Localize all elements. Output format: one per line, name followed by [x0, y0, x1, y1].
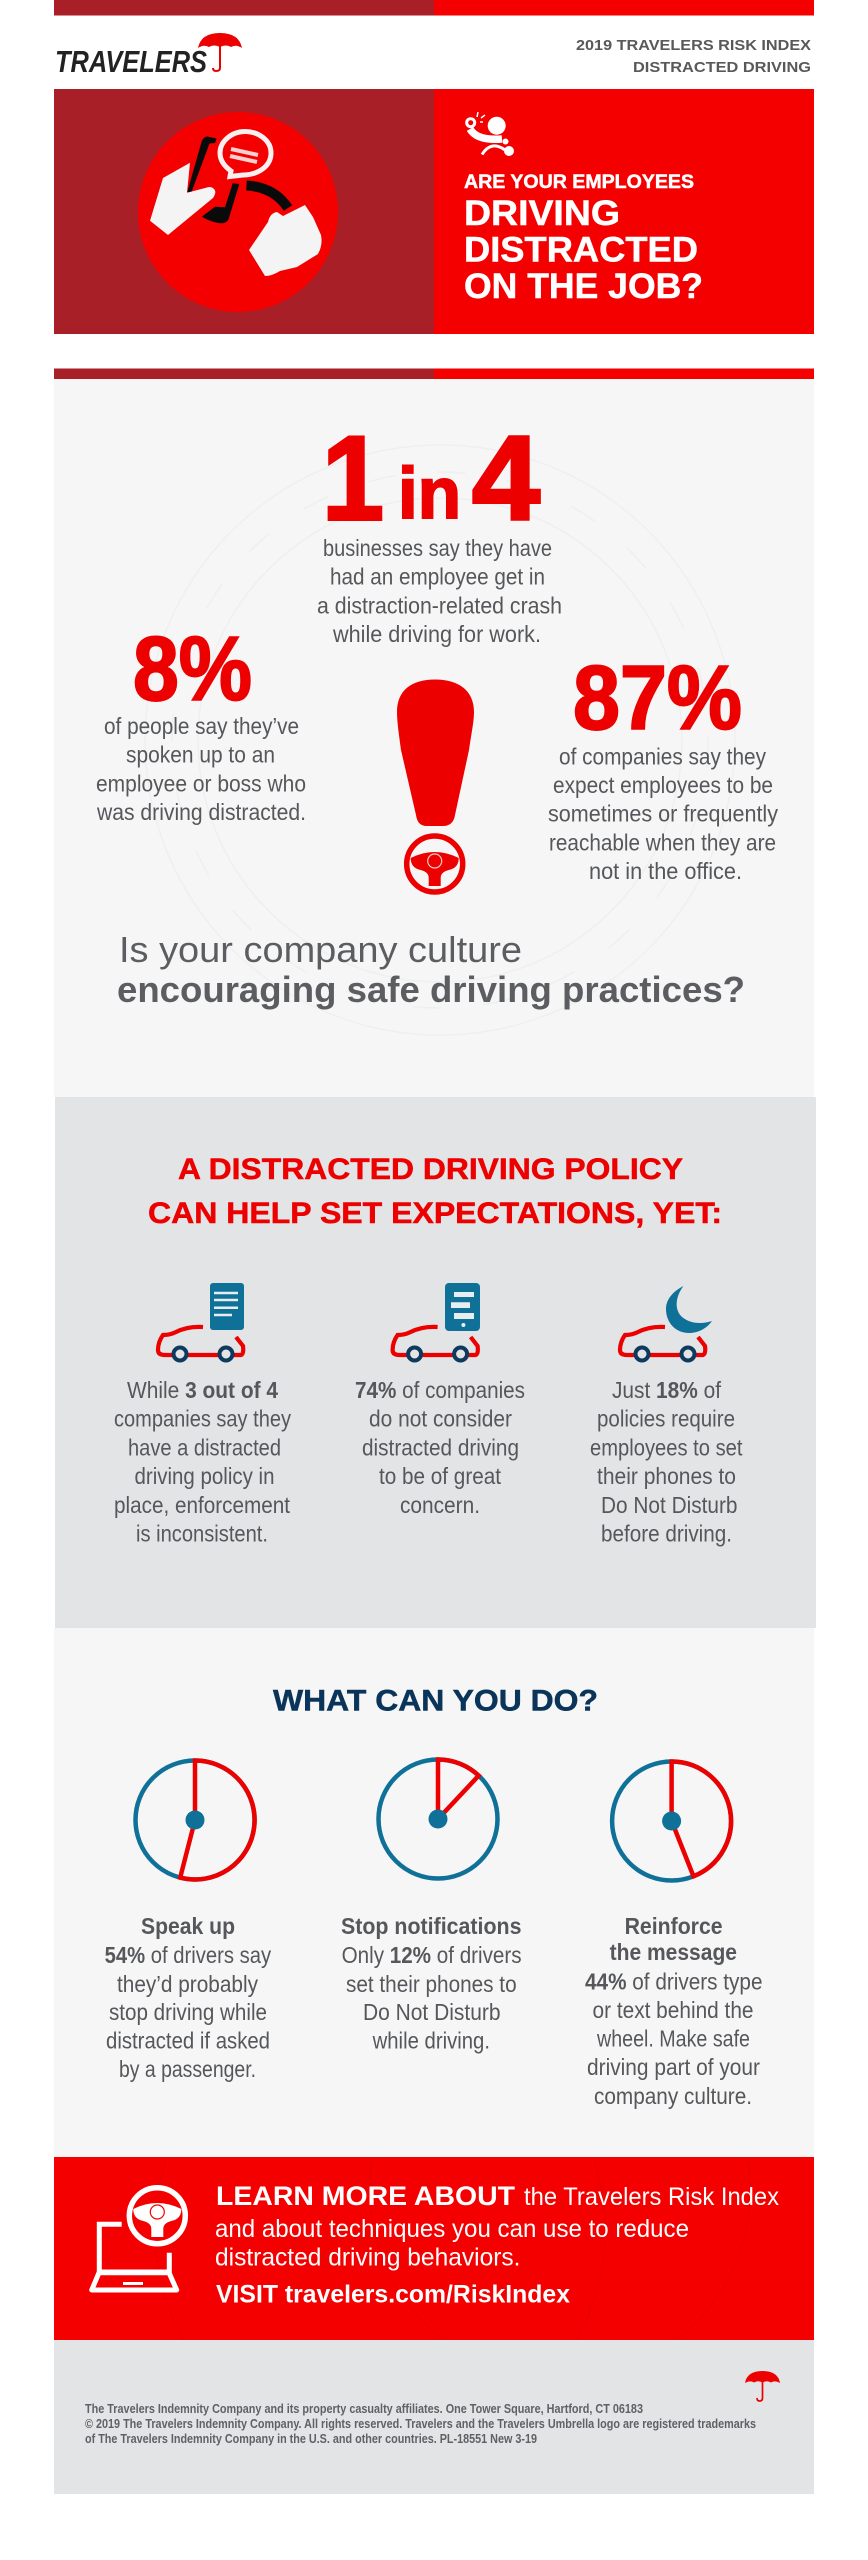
second colour bar [54, 368, 814, 379]
illustration: hands on phone and wheel [138, 112, 338, 312]
report title: 2019 TRAVELERS RISK INDEX [576, 37, 811, 54]
stat: 87%: sometimes or frequently [548, 801, 778, 827]
question: company culture: encouraging safe driving practices? [117, 969, 745, 1010]
text: reinforce the message [585, 1913, 762, 2109]
text: 74%: 74% of companies [355, 1377, 525, 1403]
legal text [85, 2401, 756, 2446]
text: stop notifications: Do Not Disturb [363, 1999, 500, 2025]
icon: distracted driver [467, 112, 514, 156]
panel: statistics [54, 379, 814, 1097]
text: reinforce the message: 44% of drivers type [585, 1968, 762, 1994]
text: stop notifications: Stop notifications [341, 1913, 522, 1939]
call to action text: the Travelers Risk Index [524, 2183, 779, 2211]
report title [576, 37, 811, 76]
stat: 1 in 4 [317, 412, 562, 647]
text: speak up: stop driving while [109, 1999, 267, 2025]
stat: 8%: of people say they’ve [104, 713, 299, 739]
icon: car with phone [393, 1283, 480, 1360]
stat: 87%: not in the office. [589, 858, 742, 884]
text: 74%: distracted driving [362, 1434, 519, 1460]
policy heading [148, 1153, 722, 1230]
text: 74%: to be of great [379, 1463, 502, 1489]
text: stop notifications [341, 1913, 522, 2054]
hero headline: ON THE JOB? [464, 267, 703, 306]
policy heading: A DISTRACTED DRIVING POLICY [178, 1153, 683, 1186]
text: stop notifications: while driving. [372, 2028, 490, 2054]
icon: exclamation mark with steering wheel [397, 680, 474, 892]
call to action text: LEARN MORE ABOUT [216, 2181, 516, 2211]
text: speak up: 54% of drivers say [105, 1942, 272, 1968]
text: 18%: their phones to [597, 1463, 736, 1489]
text: speak up: distracted if asked [106, 2028, 270, 2054]
panel: learn more [54, 2157, 814, 2340]
call to action text [215, 2181, 779, 2309]
report title: DISTRACTED DRIVING [633, 59, 811, 76]
text: 74%: do not consider [369, 1406, 512, 1432]
question: company culture [117, 929, 745, 1010]
chart: 54 percent dial [136, 1760, 255, 1880]
hero headline [464, 172, 703, 306]
text: 18%: before driving. [601, 1521, 732, 1547]
heading: what can you do: WHAT CAN YOU DO? [273, 1684, 598, 1718]
text: 18%: Do Not Disturb [601, 1492, 738, 1518]
icon: car with moon [620, 1286, 712, 1360]
text: speak up [105, 1913, 272, 2082]
legal text: of The Travelers Indemnity Company in the U.S. and other countries. PL-18551 New 3-19 [85, 2431, 537, 2446]
stat: 8%: employee or boss who [96, 770, 306, 796]
text: reinforce the message: wheel. Make safe [596, 2026, 750, 2052]
chart: 12 percent dial [378, 1760, 498, 1878]
legal text: © 2019 The Travelers Indemnity Company. All rights reserved. Travelers and the Travelers Umbrella logo are registered trademarks [85, 2416, 756, 2431]
text: reinforce the message: driving part of your [587, 2054, 760, 2080]
stat: 1 in 4: businesses say they have [323, 535, 552, 561]
question: company culture: Is your company culture [119, 929, 522, 970]
text: 74%: concern. [400, 1492, 480, 1518]
stat: 87%: 87% [573, 648, 742, 749]
logo: Travelers: TRAVELERS [55, 44, 207, 79]
top colour bar [54, 0, 814, 16]
stat: 8% [96, 619, 306, 825]
stat: 1 in 4: 1 [322, 412, 384, 546]
text: reinforce the message: company culture. [594, 2083, 752, 2109]
panel: header [55, 33, 811, 79]
call to action text: VISIT travelers.com/RiskIndex [216, 2281, 570, 2309]
text: stop notifications: set their phones to [346, 1971, 517, 1997]
hero headline: ARE YOUR EMPLOYEES [464, 172, 694, 193]
text: reinforce the message: the message [610, 1939, 737, 1965]
hero headline: DISTRACTED [464, 230, 698, 270]
call to action text: distracted driving behaviors. [215, 2244, 520, 2272]
stat: 87%: reachable when they are [549, 829, 776, 855]
stat: 8%: spoken up to an [126, 742, 275, 768]
stat: 8%: 8% [133, 619, 252, 720]
text: 18%: Just 18% of [612, 1377, 722, 1403]
text: 3 out of 4: companies say they [114, 1406, 291, 1432]
stat: 87%: of companies say they [559, 743, 766, 769]
call to action text: and about techniques you can use to reduce [215, 2215, 689, 2243]
stat: 1 in 4: while driving for work. [332, 621, 541, 647]
chart: 44 percent dial [612, 1762, 731, 1880]
text: 74% [355, 1377, 525, 1518]
text: speak up: by a passenger. [119, 2056, 256, 2082]
text: 18% [590, 1377, 743, 1547]
stat: 1 in 4: in [398, 454, 461, 534]
policy heading: CAN HELP SET EXPECTATIONS, YET: [148, 1197, 722, 1230]
icon: car with document [158, 1283, 244, 1360]
hero headline: DRIVING [464, 194, 620, 233]
panel: hero [54, 89, 814, 334]
icon: laptop with steering wheel [92, 2188, 185, 2290]
panel: policy [55, 1097, 816, 1628]
text: 3 out of 4: is inconsistent. [136, 1521, 268, 1547]
text: stop notifications: Only 12% of drivers [342, 1942, 522, 1968]
text: 3 out of 4: driving policy in [134, 1463, 274, 1489]
text: 18%: employees to set [590, 1434, 743, 1460]
panel: footer [54, 2340, 814, 2494]
text: 3 out of 4 [114, 1377, 291, 1547]
legal text: The Travelers Indemnity Company and its property casualty affiliates. One Tower Square, Hartford, CT 06183 [85, 2401, 643, 2416]
text: 3 out of 4: have a distracted [128, 1434, 281, 1460]
stat: 1 in 4: had an employee get in [330, 564, 545, 590]
text: speak up: Speak up [141, 1913, 235, 1939]
stat: 1 in 4: a distraction-related crash [317, 592, 562, 618]
text: speak up: they’d probably [117, 1971, 258, 1997]
text: reinforce the message: Reinforce [625, 1913, 723, 1939]
icon: umbrella [745, 2371, 780, 2401]
stat: 1 in 4: 4 [472, 412, 540, 546]
stat: 87% [548, 648, 778, 884]
text: 18%: policies require [597, 1406, 735, 1432]
stat: 87%: expect employees to be [553, 772, 773, 798]
text: 3 out of 4: While 3 out of 4 [127, 1377, 278, 1403]
panel: what can you do [54, 1628, 814, 2157]
text: reinforce the message: or text behind the [592, 1997, 754, 2023]
text: 3 out of 4: place, enforcement [114, 1492, 291, 1518]
stat: 8%: was driving distracted. [96, 799, 306, 825]
